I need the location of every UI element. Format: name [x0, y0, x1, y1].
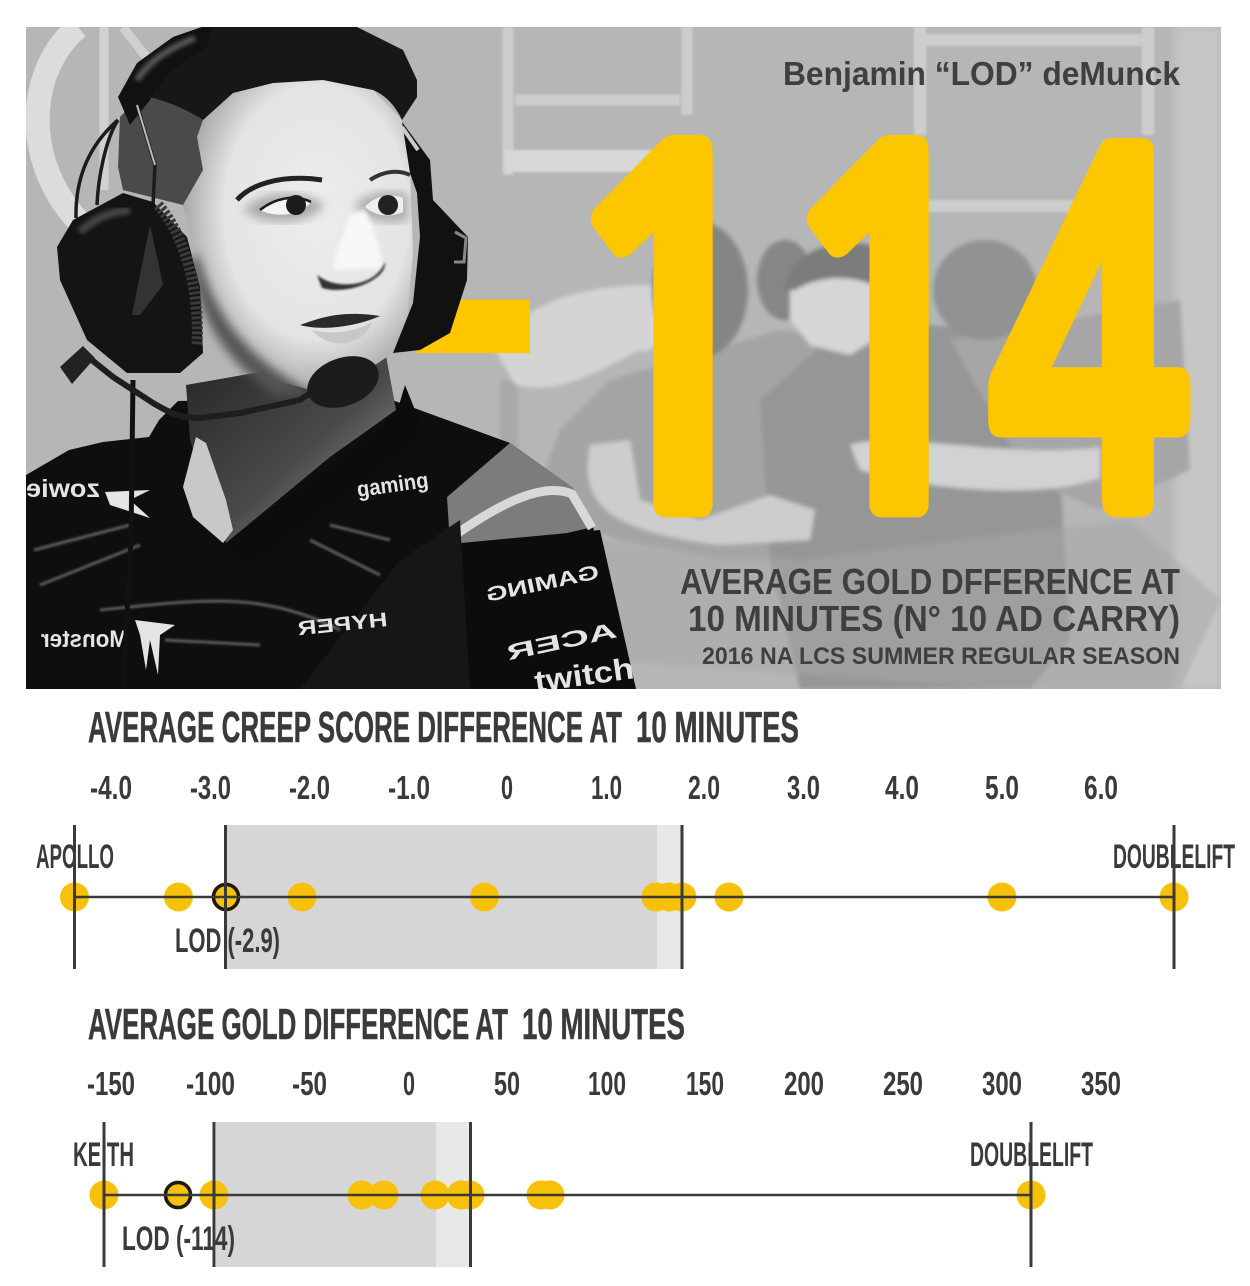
chart 2 lines: [104, 1122, 1031, 1267]
chart 1 player labels: [36, 838, 1235, 960]
chart 1 lines: [74, 825, 1174, 969]
chart 2 heading: 10 MINUTES: [522, 1000, 685, 1049]
chart 2 axis labels: -100: [186, 1065, 235, 1102]
chart 2 player labels: KEITH: [73, 1136, 134, 1174]
shirt: gaming: [355, 467, 430, 502]
chart 1 axis labels: [90, 769, 1118, 806]
chart 2 player labels: DOUBLELIFT: [970, 1136, 1093, 1174]
chart 1 axis labels: 6.0: [1084, 769, 1118, 806]
hair: [150, 20, 417, 120]
photo background: [26, 27, 1221, 689]
chart 2 axis labels: 50: [494, 1065, 520, 1102]
chart: average gold difference: [73, 1000, 1121, 1267]
chart 1 LOD marker: [214, 884, 238, 910]
chart 1 heading: 10 MINUTES: [636, 703, 799, 752]
player name: Benjamin “LOD” deMunck: [783, 55, 1181, 92]
chart 1 heading: AVERAGE CREEP SCORE DIFFERENCE AT: [88, 703, 622, 752]
side fade hair: [118, 98, 203, 205]
shirt: ACER: [504, 617, 619, 665]
shirt: HYPER: [296, 609, 389, 640]
chart 1 axis labels: 0: [501, 769, 513, 806]
chart 2 axis labels: 150: [686, 1065, 724, 1102]
chart 1 axis labels: 4.0: [885, 769, 919, 806]
chart 2 axis labels: [87, 1065, 1121, 1102]
chart 2 heading: AVERAGE GOLD DIFFERENCE AT: [88, 1000, 508, 1049]
chart 1 axis labels: -3.0: [190, 769, 231, 806]
chart 2 player labels: LOD (-114): [122, 1220, 235, 1258]
big number: -114: 1: [757, 101, 1022, 582]
chart 1 interquartile band: [227, 825, 682, 969]
shirt: [26, 397, 636, 699]
neck and collar: [183, 358, 414, 543]
chart 1 axis labels: 5.0: [985, 769, 1019, 806]
chart 2 axis labels: -50: [292, 1065, 327, 1102]
stat description: 10 MINUTES (N° 10 AD CARRY): [688, 598, 1180, 639]
chart 2 axis labels: 0: [403, 1065, 415, 1102]
face: [183, 80, 413, 395]
shirt: Monster: [41, 626, 128, 653]
chart 2 player labels: [73, 1136, 1093, 1258]
chart 1 axis labels: -4.0: [90, 769, 132, 806]
chart 2 LOD marker: [166, 1182, 190, 1208]
stat description: AVERAGE GOLD DFFERENCE AT: [680, 561, 1180, 602]
chart 1 player labels: LOD (-2.9): [175, 922, 280, 960]
microphone boom and cable: [60, 346, 379, 647]
panel: hero photo: [26, 20, 1221, 699]
chart 1 axis labels: 3.0: [787, 769, 820, 806]
shirt: twitch: [532, 652, 636, 699]
shirt: GAMING: [484, 561, 601, 607]
chart 2 interquartile band: [216, 1122, 470, 1267]
big number: -114: [416, 134, 1190, 518]
chart 1 player labels: APOLLO: [36, 838, 114, 876]
chart: average creep score difference: [36, 703, 1235, 969]
chart 1 axis labels: -2.0: [289, 769, 330, 806]
chart 1 axis labels: 2.0: [688, 769, 720, 806]
chart 1 player dots: [60, 882, 1188, 912]
chart 1 axis labels: 1.0: [591, 769, 622, 806]
big number: -114: 1: [541, 101, 806, 582]
chart 2 axis labels: -150: [87, 1065, 135, 1102]
chart 1 axis labels: -1.0: [388, 769, 430, 806]
chart 2 axis labels: 200: [784, 1065, 824, 1102]
chart 2 axis labels: 300: [982, 1065, 1022, 1102]
chart 2 axis labels: 350: [1081, 1065, 1121, 1102]
headphones: [57, 23, 468, 373]
big number: -114: -: [398, 37, 548, 539]
chart 2 axis labels: 100: [588, 1065, 626, 1102]
background players huddle: [495, 222, 1221, 689]
portrait of LOD: [26, 20, 636, 699]
shirt: zowie: [26, 475, 100, 503]
big number: -114: 4: [987, 111, 1192, 576]
chart 2 axis labels: 250: [883, 1065, 923, 1102]
stat description: [680, 568, 1180, 664]
chart 2 player dots: [90, 1180, 1046, 1210]
stat description: 2016 NA LCS SUMMER REGULAR SEASON: [702, 643, 1180, 670]
